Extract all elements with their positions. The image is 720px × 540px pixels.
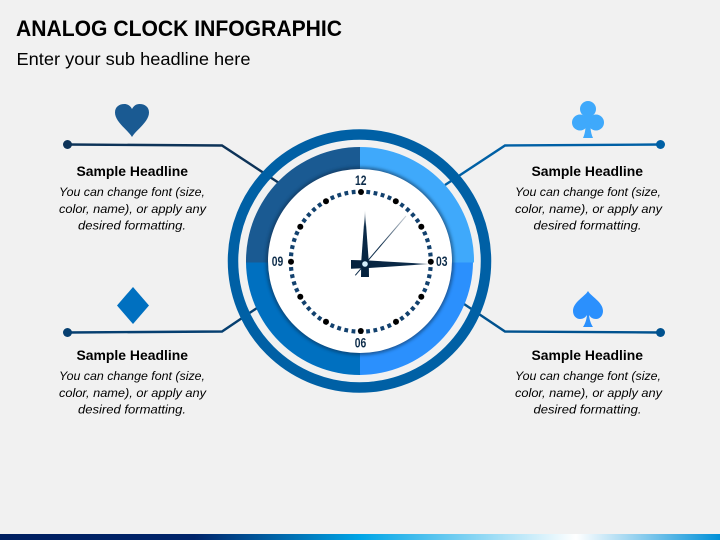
text block: bottom left: You can change font (size, (59, 369, 205, 383)
quadrant ring: bottom left (246, 262, 360, 375)
bottom gradient bar (0, 534, 720, 540)
icon: club (572, 101, 604, 138)
hour numerals: 03 (436, 253, 448, 269)
text block: bottom left (59, 348, 207, 416)
hour numerals: 06 (355, 335, 366, 351)
hour numerals (272, 172, 448, 351)
hour hand (361, 210, 369, 277)
text block: top left: You can change font (size, (59, 185, 205, 199)
outer ring (233, 134, 486, 388)
hour numerals: 12 (355, 172, 367, 188)
hour numerals: 09 (272, 253, 283, 269)
icon: spade (573, 291, 603, 327)
quadrant ring: top right (360, 147, 474, 262)
second hand (355, 216, 406, 275)
title: ANALOG CLOCK INFOGRAPHIC (16, 16, 342, 41)
minute hand (351, 260, 429, 269)
text block: top left: Sample Headline (76, 164, 188, 179)
subtitle: Enter your sub headline here (16, 49, 250, 69)
minute ticks (291, 192, 431, 332)
pivot (362, 261, 368, 267)
quadrant ring: bottom right (360, 262, 473, 375)
text block: bottom left: Sample Headline (76, 348, 188, 363)
text block: bottom left: desired formatting. (78, 402, 186, 416)
clock (233, 134, 486, 388)
connector: top left (63, 140, 279, 183)
clock face (268, 169, 452, 353)
connector: bottom right (464, 304, 665, 337)
clock face shadow (266, 167, 454, 355)
text block: top right (515, 164, 663, 232)
icon: heart (115, 104, 149, 137)
text block: bottom right: desired formatting. (534, 402, 642, 416)
connector: bottom left (63, 308, 257, 337)
text block: bottom right: color, name), or apply any (515, 386, 663, 400)
icon: diamond (117, 287, 149, 324)
text block: bottom right: You can change font (size, (515, 369, 661, 383)
text block: top right: color, name), or apply any (515, 202, 663, 216)
text block: top left: desired formatting. (78, 218, 186, 232)
text block: top left: color, name), or apply any (59, 202, 207, 216)
text block: bottom right: Sample Headline (532, 348, 643, 363)
text block: bottom left: color, name), or apply any (59, 386, 207, 400)
hour dots (288, 189, 434, 334)
text block: top right: You can change font (size, (515, 185, 661, 199)
text block: top left (59, 164, 207, 232)
text block: bottom right (515, 348, 663, 416)
quadrant ring: top left (246, 147, 360, 262)
connector: top right (445, 140, 665, 185)
text block: top right: desired formatting. (534, 218, 642, 232)
text block: top right: Sample Headline (532, 164, 643, 179)
